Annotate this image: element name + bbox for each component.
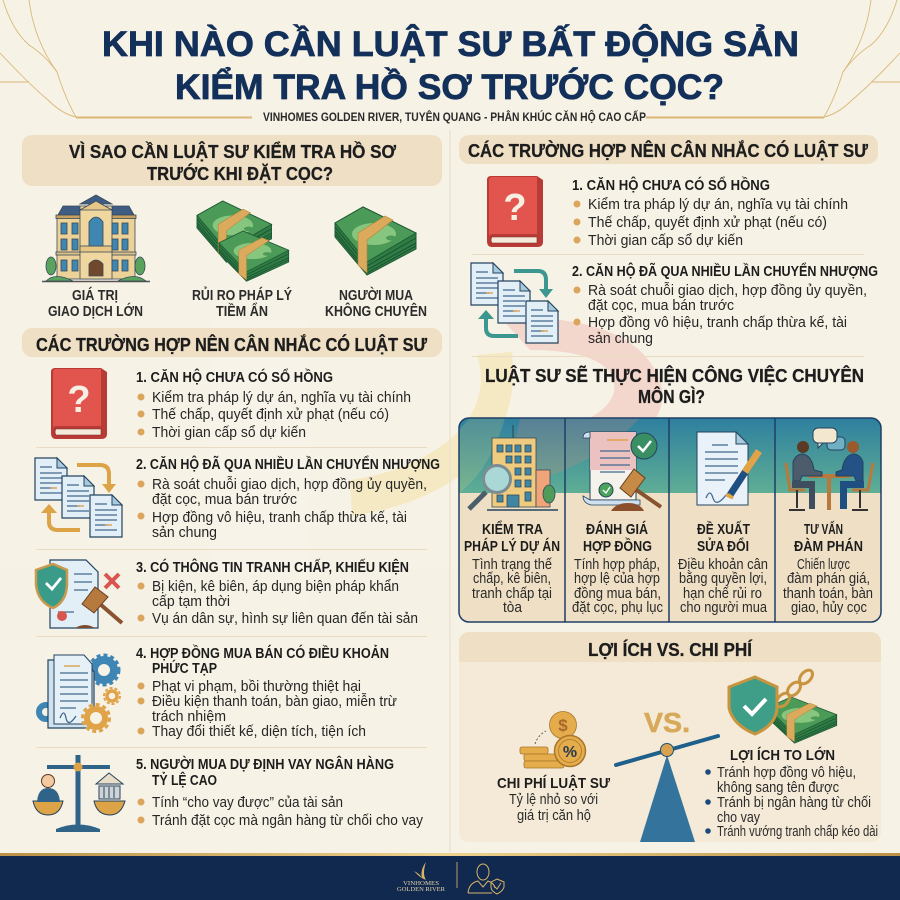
label: big benefits: Tránh hợp đồng vô hiệu, bbox=[717, 765, 856, 781]
column 3 text: SỬA ĐỔI bbox=[697, 537, 749, 555]
footer band bbox=[0, 853, 900, 900]
icon: red book bbox=[51, 368, 107, 439]
case 2: Rà soát chuỗi giao dịch, hợp đồng ủy quyền, bbox=[152, 476, 427, 493]
icon: coins: % bbox=[563, 744, 577, 761]
column 1 text: PHÁP LÝ DỰ ÁN bbox=[464, 537, 560, 555]
column 4 text: TƯ VẤN bbox=[804, 521, 843, 538]
case 2: Hợp đồng vô hiệu, tranh chấp thừa kế, tài bbox=[152, 509, 407, 526]
column 4 text: Chiến lược bbox=[797, 557, 850, 573]
column 1 text bbox=[464, 520, 560, 616]
subtitle: VINHOMES GOLDEN RIVER, TUYÊN QUANG - PHÂN KHÚC CĂN HỘ CAO CẤP bbox=[263, 111, 646, 124]
column 3 text bbox=[678, 521, 768, 616]
column 4 text: đàm phán giá, bbox=[787, 571, 870, 587]
icon: red book right bbox=[487, 176, 543, 247]
heading: why a lawyer bbox=[22, 135, 442, 186]
heading: cases bbox=[22, 328, 442, 357]
column 1 text: tranh chấp tại bbox=[472, 586, 552, 602]
label: big benefits bbox=[705, 746, 878, 840]
case 4 bbox=[136, 644, 397, 740]
panel: why a lawyer bbox=[22, 135, 442, 320]
case 3: cấp tạm thời bbox=[152, 593, 230, 610]
decorative corner lines: left bbox=[0, 0, 900, 118]
panel: cases, right column bbox=[459, 135, 878, 356]
heading: cases: CÁC TRƯỜNG HỢP NÊN CÂN NHẮC CÓ LUẬT SƯ bbox=[36, 334, 428, 355]
footer logo: VINHOMES bbox=[403, 881, 439, 887]
icon: building and magnifier bbox=[469, 425, 558, 510]
column 3 text: hạn chế rủi ro bbox=[683, 586, 762, 602]
case 4: Phạt vi phạm, bồi thường thiệt hại bbox=[152, 678, 361, 695]
label: transaction value: GIAO DỊCH LỚN bbox=[48, 302, 143, 320]
right case 1: Thời gian cấp sổ dự kiến bbox=[588, 232, 743, 249]
heading: cases right bbox=[459, 135, 878, 164]
heading: why a lawyer: TRƯỚC KHI ĐẶT CỌC? bbox=[147, 163, 333, 184]
VS label: VS. bbox=[644, 707, 690, 738]
title: KIỂM TRA HỒ SƠ TRƯỚC CỌC? bbox=[175, 67, 724, 107]
panel background and heading bbox=[459, 632, 881, 842]
icon: documents with teal arrows bbox=[471, 263, 558, 343]
column 1 text: chấp, kê biên, bbox=[473, 571, 551, 587]
icon: mansion bbox=[42, 195, 150, 282]
icon: balance bbox=[616, 736, 718, 842]
case 4: trách nhiệm bbox=[152, 708, 226, 725]
column 3 text: bằng quyền lợi, bbox=[679, 570, 767, 587]
heading: why a lawyer: VÌ SAO CẦN LUẬT SƯ KIỂM TRA HỒ SƠ bbox=[69, 141, 396, 162]
right case 2: sản chung bbox=[588, 330, 653, 347]
label: big benefits: cho vay bbox=[717, 810, 761, 826]
case 4: PHỨC TẠP bbox=[152, 659, 217, 677]
case 4: Thay đổi thiết kế, diện tích, tiện ích bbox=[152, 723, 366, 740]
heading: lawyer work: MÔN GÌ? bbox=[638, 386, 705, 407]
label: non-expert buyer: KHÔNG CHUYÊN bbox=[325, 302, 427, 320]
case 4: Điều kiện thanh toán, bàn giao, miễn trừ bbox=[152, 693, 397, 710]
case 3: Bị kiện, kê biên, áp dụng biện pháp khẩn bbox=[152, 578, 399, 595]
right case 2: đặt cọc, mua bán trước bbox=[588, 297, 734, 314]
icon: documents with gold arrows bbox=[35, 458, 122, 537]
icon: two money stacks bbox=[197, 201, 289, 281]
case 5: Tính “cho vay được” của tài sản bbox=[152, 794, 343, 811]
icon: document and pen bbox=[697, 432, 759, 505]
label: transaction value: GIÁ TRỊ bbox=[72, 287, 118, 304]
footer icon: lawyer with shield bbox=[468, 864, 504, 894]
column divider bbox=[449, 130, 451, 852]
case 3: 3. CÓ THÔNG TIN TRANH CHẤP, KHIẾU KIỆN bbox=[136, 558, 409, 576]
case 2: 2. CĂN HỘ ĐÃ QUA NHIỀU LẦN CHUYỂN NHƯỢNG bbox=[136, 455, 440, 473]
title: KHI NÀO CẦN LUẬT SƯ BẤT ĐỘNG SẢN bbox=[102, 24, 799, 64]
column 3 text: ĐỀ XUẤT bbox=[697, 521, 750, 538]
case 2: đặt cọc, mua bán trước bbox=[152, 491, 297, 508]
label: non-expert buyer bbox=[325, 286, 427, 320]
panel: cases, left column bbox=[22, 328, 442, 832]
label: big benefits: LỢI ÍCH TO LỚN bbox=[730, 746, 835, 764]
right case 2: Hợp đồng vô hiệu, tranh chấp thừa kế, tài bbox=[588, 314, 847, 331]
label: legal risk: TIỀM ẨN bbox=[216, 302, 268, 320]
column 4 text: ĐÀM PHÁN bbox=[794, 538, 863, 555]
case 2 bbox=[136, 455, 440, 541]
case 3: Vụ án dân sự, hình sự liên quan đến tài sản bbox=[152, 610, 418, 627]
right case 1 bbox=[572, 176, 848, 249]
heading: lawyer work bbox=[485, 365, 864, 407]
label: non-expert buyer: NGƯỜI MUA bbox=[339, 286, 413, 304]
column 1 text: tòa bbox=[503, 600, 523, 616]
right case 1: Thế chấp, quyết định xử phạt (nếu có) bbox=[588, 214, 827, 231]
case 5: TỶ LỆ CAO bbox=[152, 771, 217, 789]
column 2 text: Tính hợp pháp, bbox=[574, 557, 660, 573]
right case 1: 1. CĂN HỘ CHƯA CÓ SỔ HỒNG bbox=[572, 176, 770, 194]
icon: money stack bbox=[335, 207, 416, 275]
column 2 text: đặt cọc, phụ lục bbox=[572, 600, 663, 616]
column 3 text: Điều khoản cân bbox=[678, 557, 768, 573]
icon: contract with gears bbox=[39, 655, 120, 732]
footer logo bbox=[397, 862, 445, 893]
case 5: 5. NGƯỜI MUA DỰ ĐỊNH VAY NGÂN HÀNG bbox=[136, 755, 394, 773]
icon: contract and gavel bbox=[583, 432, 661, 511]
column 1 text: KIỂM TRA bbox=[482, 520, 543, 538]
heading: cases right: CÁC TRƯỜNG HỢP NÊN CÂN NHẮC CÓ LUẬT SƯ bbox=[468, 140, 869, 161]
right case 2: Rà soát chuỗi giao dịch, hợp đồng ủy quyền, bbox=[588, 282, 867, 299]
column 2 text: đồng mua bán, bbox=[574, 586, 661, 602]
icon: shield, document and gavel bbox=[36, 560, 122, 628]
right case 2 bbox=[572, 262, 878, 347]
case 1: 1. CĂN HỘ CHƯA CÓ SỔ HỒNG bbox=[136, 368, 333, 386]
label: big benefits: không sang tên được bbox=[717, 780, 839, 796]
label: lawyer cost: CHI PHÍ LUẬT SƯ bbox=[497, 774, 610, 792]
case 5 bbox=[136, 755, 423, 829]
label: legal risk bbox=[192, 286, 292, 320]
icon: shield, chain and money bbox=[729, 668, 837, 743]
label: lawyer cost bbox=[497, 774, 610, 824]
column 1 text: Tình trạng thế bbox=[472, 557, 552, 573]
column 4 text: giao, hủy cọc bbox=[791, 600, 867, 616]
icon: scales with buyer and bank bbox=[33, 755, 125, 832]
case 1: Thế chấp, quyết định xử phạt (nếu có) bbox=[152, 406, 389, 423]
panel: lawyer tasks table bbox=[459, 418, 881, 622]
column 4 text bbox=[783, 521, 873, 616]
label: lawyer cost: giá trị căn hộ bbox=[517, 808, 591, 824]
column 4 text: thanh toán, bàn bbox=[783, 586, 873, 602]
title bbox=[102, 24, 799, 107]
footer logo: GOLDEN RIVER bbox=[397, 887, 445, 893]
case 4: 4. HỢP ĐỒNG MUA BÁN CÓ ĐIỀU KHOẢN bbox=[136, 644, 389, 662]
label: transaction value bbox=[48, 287, 143, 320]
case 1 bbox=[136, 368, 411, 441]
column 2 text: hợp lệ của hợp bbox=[574, 571, 660, 587]
icon: two people negotiating bbox=[786, 428, 873, 510]
case 3 bbox=[136, 558, 418, 627]
right case 1: Kiểm tra pháp lý dự án, nghĩa vụ tài chính bbox=[588, 196, 848, 213]
case 2: sản chung bbox=[152, 524, 217, 541]
watermark logo bbox=[0, 317, 662, 640]
panel background and heading: LỢI ÍCH VS. CHI PHÍ bbox=[588, 639, 753, 660]
case 5: Tránh đặt cọc mà ngân hàng từ chối cho vay bbox=[152, 812, 423, 829]
label: big benefits: Tránh bị ngân hàng từ chối bbox=[717, 795, 871, 811]
panel: benefit vs cost bbox=[459, 632, 881, 842]
column 3 text: cho người mua bbox=[680, 600, 768, 616]
icon: coins: $ bbox=[558, 716, 568, 735]
case 1: Thời gian cấp sổ dự kiến bbox=[152, 424, 306, 441]
icon: coins bbox=[520, 712, 586, 768]
column 2 text: HỢP ĐỒNG bbox=[583, 537, 652, 555]
label: lawyer cost: Tỷ lệ nhỏ so với bbox=[509, 792, 598, 808]
case 1: Kiểm tra pháp lý dự án, nghĩa vụ tài chính bbox=[152, 389, 411, 406]
column 2 text: ĐÁNH GIÁ bbox=[586, 521, 648, 538]
label: legal risk: RỦI RO PHÁP LÝ bbox=[192, 286, 292, 304]
heading: lawyer work: LUẬT SƯ SẼ THỰC HIỆN CÔNG VIỆC CHUYÊN bbox=[485, 365, 864, 386]
column 2 text bbox=[572, 521, 663, 616]
